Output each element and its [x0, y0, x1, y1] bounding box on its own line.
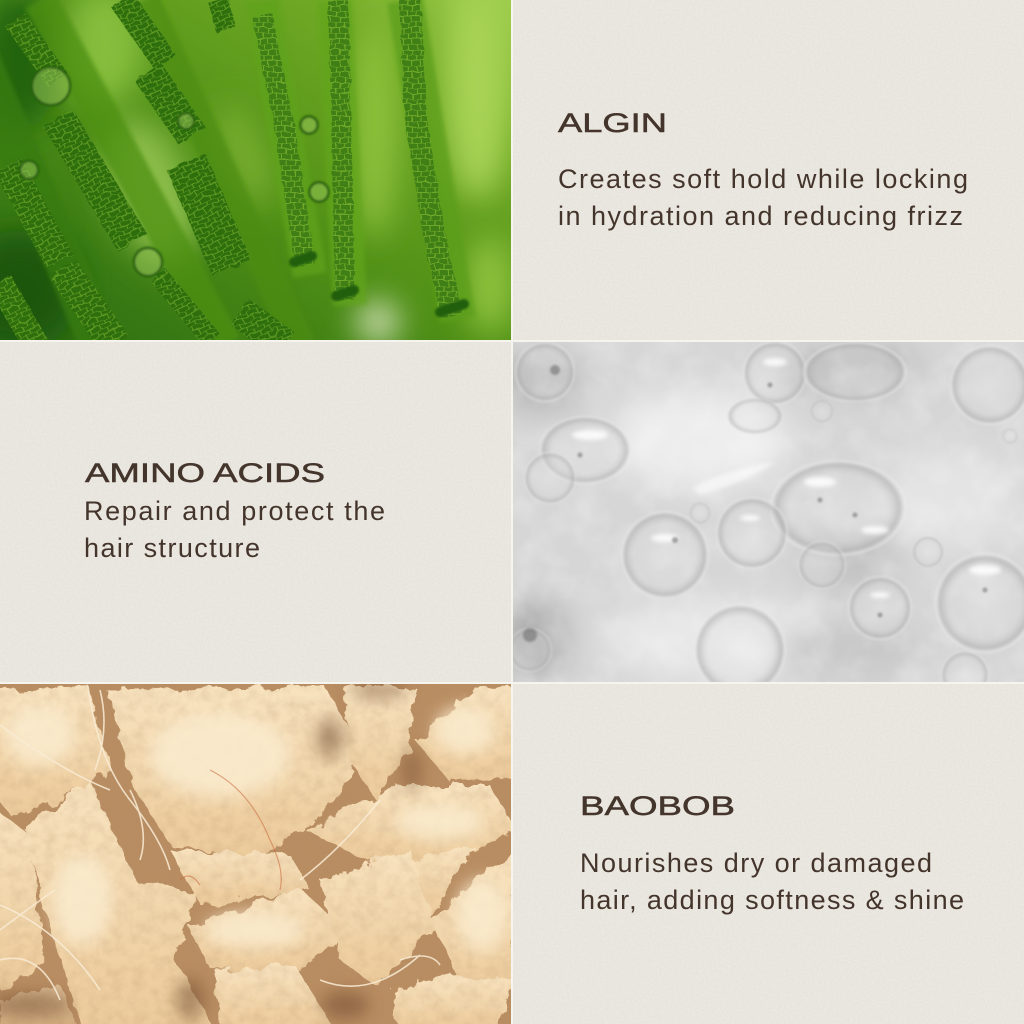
heading: amino acids: AMINO ACIDS [85, 458, 325, 488]
panel: baobab photograph [0, 682, 520, 1024]
panel: algae photograph [0, 0, 514, 350]
description: amino acids: hair structure [84, 533, 260, 563]
description: baobab [580, 848, 964, 915]
description: algin [558, 164, 968, 231]
description: algin: Creates soft hold while locking [558, 164, 968, 194]
description: amino acids: Repair and protect the [84, 496, 385, 526]
description: baobab: Nourishes dry or damaged [580, 848, 932, 878]
text block: amino acids [84, 458, 385, 563]
description: baobab: hair, adding softness & shine [580, 885, 964, 915]
heading: baobab: BAOBOB [580, 791, 735, 821]
description: amino acids [84, 496, 385, 563]
panel: baobab text background [513, 684, 1024, 1024]
text block: algin [558, 108, 968, 231]
panel: gel bubbles photograph [500, 341, 1024, 699]
heading: algin: ALGIN [558, 108, 667, 138]
description: algin: in hydration and reducing frizz [558, 201, 963, 231]
panel: amino acids text background [0, 342, 511, 682]
panel: algin text background [513, 0, 1024, 340]
text block: baobab [580, 791, 964, 915]
